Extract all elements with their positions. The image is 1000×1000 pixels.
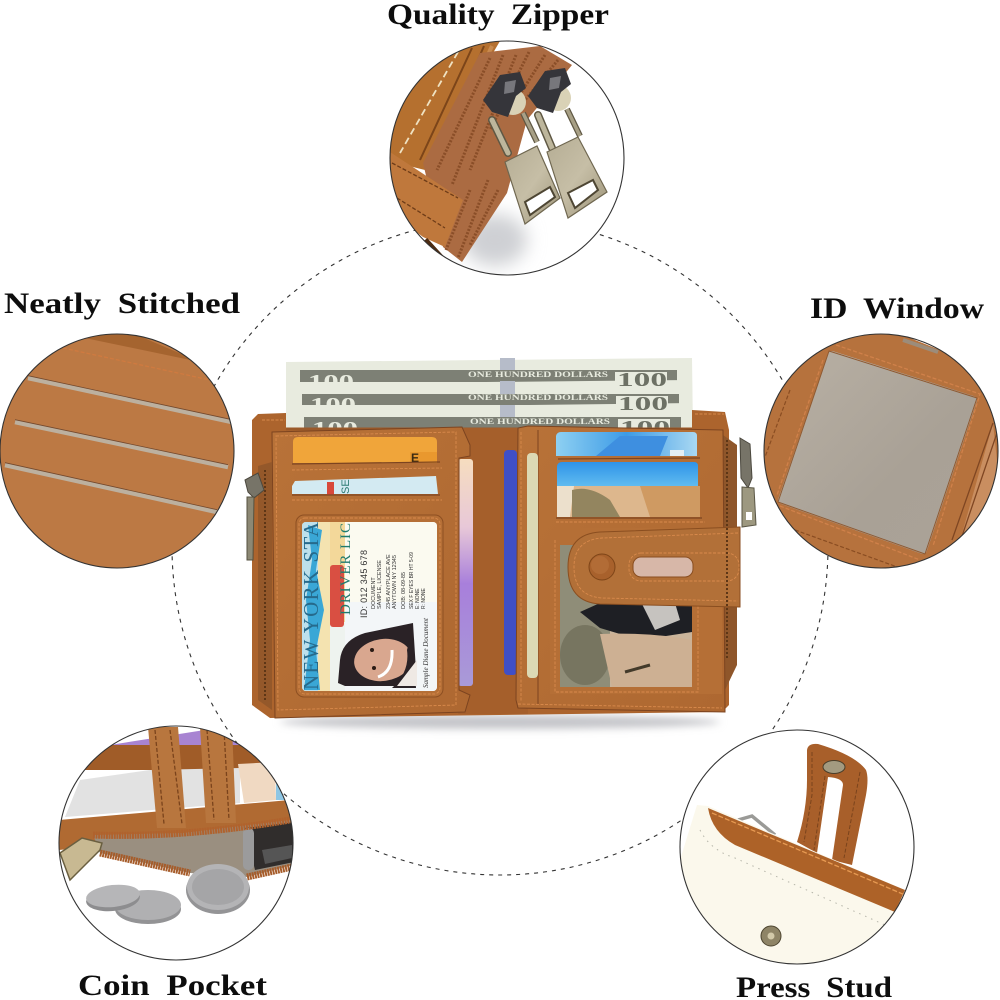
banknotes: ONE HUNDRED DOLLARS bbox=[468, 370, 609, 379]
banknotes: 100 bbox=[618, 393, 668, 415]
card: ID strip bbox=[292, 476, 438, 494]
coins bbox=[85, 864, 250, 924]
snap socket bbox=[761, 926, 781, 946]
zipper pull bbox=[60, 838, 102, 880]
zipper right bbox=[727, 438, 756, 660]
photo window frame bbox=[550, 528, 722, 694]
panel: quality zipper detail bbox=[385, 41, 624, 275]
blue card bbox=[556, 432, 697, 456]
banknotes bbox=[286, 358, 693, 440]
dashed connecting circle bbox=[172, 219, 828, 875]
strap loop bbox=[797, 744, 868, 865]
left panel: SE bbox=[340, 479, 352, 494]
driver license: ANYTOWN NY 12345 bbox=[392, 555, 398, 609]
ID window frame bbox=[296, 515, 443, 697]
brown edge bbox=[708, 808, 905, 912]
driver license: NEW YORK STA bbox=[299, 521, 323, 690]
panel: central wallet bbox=[245, 358, 756, 729]
panel: coin pocket detail bbox=[59, 726, 295, 960]
strap slot photo bbox=[633, 557, 693, 577]
icon: zipper pull right bbox=[528, 68, 607, 218]
card edge: purple bbox=[458, 459, 473, 686]
wallet back bbox=[252, 410, 729, 718]
panel: ID window detail bbox=[764, 334, 998, 568]
driver license: SAMPLE, LICENSE bbox=[377, 560, 383, 609]
banknotes: ONE HUNDRED DOLLARS bbox=[470, 417, 611, 426]
driver license: R: NONE bbox=[421, 588, 427, 609]
cream body bbox=[681, 805, 894, 964]
light blue card bbox=[557, 462, 698, 487]
left panel: E bbox=[411, 451, 419, 465]
driver license: E: NONE bbox=[415, 588, 421, 609]
landscape card bbox=[557, 486, 700, 517]
straps bbox=[148, 727, 186, 828]
banknotes: 100 bbox=[310, 394, 356, 416]
banknotes: ONE HUNDRED DOLLARS bbox=[468, 393, 609, 402]
driver license: Sample Diane Document bbox=[422, 617, 430, 688]
banknotes: 100 bbox=[312, 418, 358, 440]
driver license: DRIVER LIC bbox=[338, 523, 354, 615]
zipper tape bbox=[93, 820, 290, 835]
panel: press stud detail bbox=[680, 730, 914, 975]
panel: neatly stitched detail bbox=[0, 332, 235, 568]
banknotes: 100 bbox=[308, 371, 354, 393]
driver license bbox=[299, 521, 437, 691]
wallet shadow bbox=[280, 715, 720, 729]
center spine bbox=[458, 428, 528, 714]
zipper left bbox=[245, 462, 272, 710]
zipper glimpse bbox=[738, 816, 775, 835]
icon: zipper pull left bbox=[483, 72, 560, 224]
snap button bbox=[589, 554, 615, 580]
metal snap on strap bbox=[823, 760, 845, 774]
banknotes: 100 bbox=[617, 369, 667, 391]
driver license: 2345 ANYPLACE AVE bbox=[386, 554, 392, 609]
heading: ID Window: ID Window bbox=[810, 292, 984, 325]
driver license: ID: 012 345 678 bbox=[359, 550, 369, 618]
photo bbox=[560, 545, 692, 687]
right panel bbox=[516, 426, 737, 712]
card edge: cream bbox=[527, 453, 538, 678]
driver license: DOB: 08-09-85 bbox=[401, 572, 407, 609]
driver license: DOCUMENT bbox=[371, 577, 377, 609]
strap with snap bbox=[568, 527, 740, 607]
orange card bbox=[293, 437, 437, 463]
banknotes: 100 bbox=[620, 417, 670, 439]
card edge: blue bbox=[504, 450, 517, 675]
pocket interior bbox=[93, 820, 293, 877]
driver license: SEX F EYES BR HT 5-09 bbox=[409, 552, 415, 609]
left panel bbox=[272, 427, 470, 718]
heading: Neatly Stitched: Neatly Stitched bbox=[4, 287, 240, 320]
ID portrait bbox=[338, 623, 417, 688]
